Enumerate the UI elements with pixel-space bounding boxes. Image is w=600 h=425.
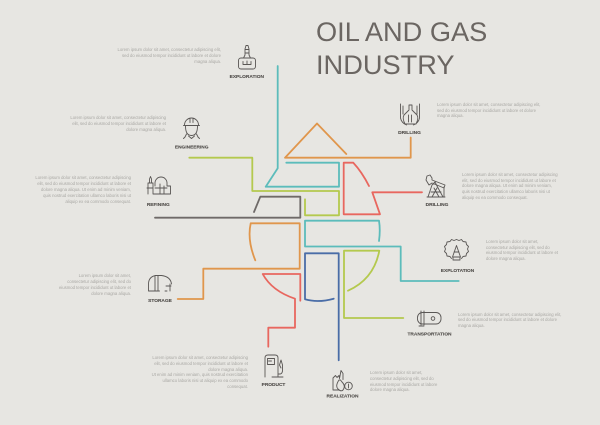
text: drilling description: sed do eiusmod tempor incididunt ut labore et dolore xyxy=(437,108,537,113)
text: engineering description: elit, sed do eiusmod tempor incididunt ut labore et xyxy=(72,121,167,126)
label: explotation: EXPLOTATION xyxy=(441,268,475,274)
text: transportation description xyxy=(458,312,561,328)
text: refining description: elit, sed do eiusmod tempor incididunt ut labore et xyxy=(37,181,132,186)
title: INDUSTRY xyxy=(316,49,454,80)
icon: tanker xyxy=(418,311,441,326)
transportation block xyxy=(407,311,561,338)
text: explotation description: dolore magna aliqua. xyxy=(486,256,526,261)
text: realization description: consectetur adipiscing elit, sed do xyxy=(370,376,434,381)
pipeline: engineering green xyxy=(189,158,339,215)
text: explotation description: Lorem ipsum dolor sit amet, xyxy=(486,239,538,244)
title xyxy=(316,16,487,80)
text: product description: consequat. xyxy=(227,384,248,389)
label: refining: REFINING xyxy=(147,202,170,208)
label: drilling: DRILLING xyxy=(426,202,449,208)
text: realization description xyxy=(370,370,438,392)
text: pumpjack description: Lorem ipsum dolor sit amet, consectetur adipiscing xyxy=(462,172,558,177)
product block xyxy=(152,355,285,389)
text: explotation description: eiusmod tempor incididunt ut labore et xyxy=(486,250,559,255)
text: storage description: eiusmod tempor incididunt ut labore et xyxy=(59,285,132,290)
text: exploration description: magna aliqua. xyxy=(194,59,221,64)
pipeline: product red xyxy=(263,274,300,347)
text: product description: elit, sed do eiusmod tempor incididunt ut labore et xyxy=(154,361,249,366)
text: drilling description xyxy=(437,102,540,118)
drilling top block xyxy=(398,102,540,136)
text: product description: Ut enim ad minim veniam, quis nostrud exercitation xyxy=(152,372,249,377)
text: drilling description: Lorem ipsum dolor sit amet, consectetur adipiscing elit, xyxy=(437,102,540,107)
text: realization description: dolore magna aliqua. xyxy=(370,387,410,392)
text: transportation description: magna aliqua. xyxy=(458,323,485,328)
text: realization description: Lorem ipsum dolor sit amet, xyxy=(370,370,422,375)
text: product description: dolore magna aliqua. xyxy=(208,367,248,372)
title: OIL AND GAS xyxy=(316,16,487,47)
icon: refinery xyxy=(147,176,170,194)
icon: engineer helmet xyxy=(184,118,200,138)
text: product description xyxy=(152,355,249,389)
text: exploration description: Lorem ipsum dolor sit amet, consectetur adipiscing elit, xyxy=(118,47,221,52)
label: product: PRODUCT xyxy=(262,382,285,388)
text: refining description: Lorem ipsum dolor sit amet, consectetur adipiscing xyxy=(35,175,132,180)
text: storage description: Lorem ipsum dolor sit amet, xyxy=(79,273,131,278)
text: product description: ullamco laboris nisi ut aliquip ex ea commodo xyxy=(162,378,249,383)
label: engineering: ENGINEERING xyxy=(175,144,209,150)
text: refining description: quis nostrud exercitation ullamco laboris nisi ut xyxy=(43,193,132,198)
text: explotation description: consectetur adipiscing elit, sed do xyxy=(486,245,550,250)
pipeline: exploration teal xyxy=(266,66,339,187)
text: engineering description xyxy=(70,115,167,132)
label: transportation: TRANSPORTATION xyxy=(407,332,452,338)
text: refining description: dolore magna aliqua. Ut enim ad minim veniam, xyxy=(41,187,131,192)
pipeline: storage orange xyxy=(178,223,300,299)
refining block xyxy=(35,175,170,208)
text: refining description: aliquip ex ea commodo consequat. xyxy=(65,199,131,204)
text: storage description: dolore magna aliqua. xyxy=(91,291,131,296)
text: pumpjack description: elit, sed do eiusmod tempor incididunt ut labore et xyxy=(462,178,557,183)
icon: storage tanks xyxy=(148,276,172,291)
text: pumpjack description: dolore magna aliqua. Ut enim ad minim veniam, xyxy=(462,183,552,188)
realization block xyxy=(327,370,438,400)
label: realization: REALIZATION xyxy=(327,394,359,400)
icon: gear with derrick xyxy=(444,240,468,260)
pipeline: realization blue xyxy=(305,253,339,360)
pipeline: drilling orange triangle xyxy=(285,124,411,158)
text: pumpjack description: quis nostrud exercitation ullamco laboris nisi ut xyxy=(462,189,551,194)
drilling pumpjack block xyxy=(426,172,558,208)
text: exploration description: sed do eiusmod tempor incididunt ut labore et dolore xyxy=(122,53,222,58)
text: product description: Lorem ipsum dolor sit amet, consectetur adipiscing xyxy=(152,355,249,360)
text: engineering description: dolore magna aliqua. xyxy=(126,127,166,132)
text: transportation description: sed do eiusmod tempor incididunt ut labore et dolore xyxy=(458,317,558,322)
label: exploration: EXPLORATION xyxy=(230,74,264,80)
icon: drilling flask xyxy=(400,104,420,125)
storage block xyxy=(59,273,173,304)
pipeline: explotation teal xyxy=(305,221,459,281)
text: exploration description xyxy=(118,47,222,64)
text: pumpjack description: aliquip ex ea commodo consequat. xyxy=(462,195,528,200)
text: engineering description: Lorem ipsum dolor sit amet, consectetur adipiscing xyxy=(70,115,167,120)
icon: exploration rig xyxy=(238,46,256,69)
explotation block xyxy=(441,239,559,274)
text: refining description xyxy=(35,175,132,204)
text: transportation description: Lorem ipsum dolor sit amet, consectetur adipiscing elit, xyxy=(458,312,561,317)
exploration block xyxy=(118,46,264,80)
pipeline: transportation lime xyxy=(344,251,403,318)
pipeline: drilling red xyxy=(344,163,422,214)
text: storage description: consectetur adipiscing elit, sed do xyxy=(67,279,132,284)
icon: oil drop and coin xyxy=(333,370,352,391)
central pipeline diagram xyxy=(155,66,459,360)
label: drilling: DRILLING xyxy=(398,130,421,136)
label: storage: STORAGE xyxy=(148,298,173,304)
icon: pumpjack xyxy=(426,175,445,197)
icon: fuel pump xyxy=(265,355,283,377)
text: explotation description xyxy=(486,239,559,261)
engineering block xyxy=(70,115,209,150)
text: realization description: eiusmod tempor incididunt ut labore xyxy=(370,382,438,387)
pipeline: refining grey xyxy=(155,197,300,218)
text: pumpjack description xyxy=(462,172,558,200)
text: drilling description: magna aliqua. xyxy=(437,113,464,118)
text: storage description xyxy=(59,273,132,296)
